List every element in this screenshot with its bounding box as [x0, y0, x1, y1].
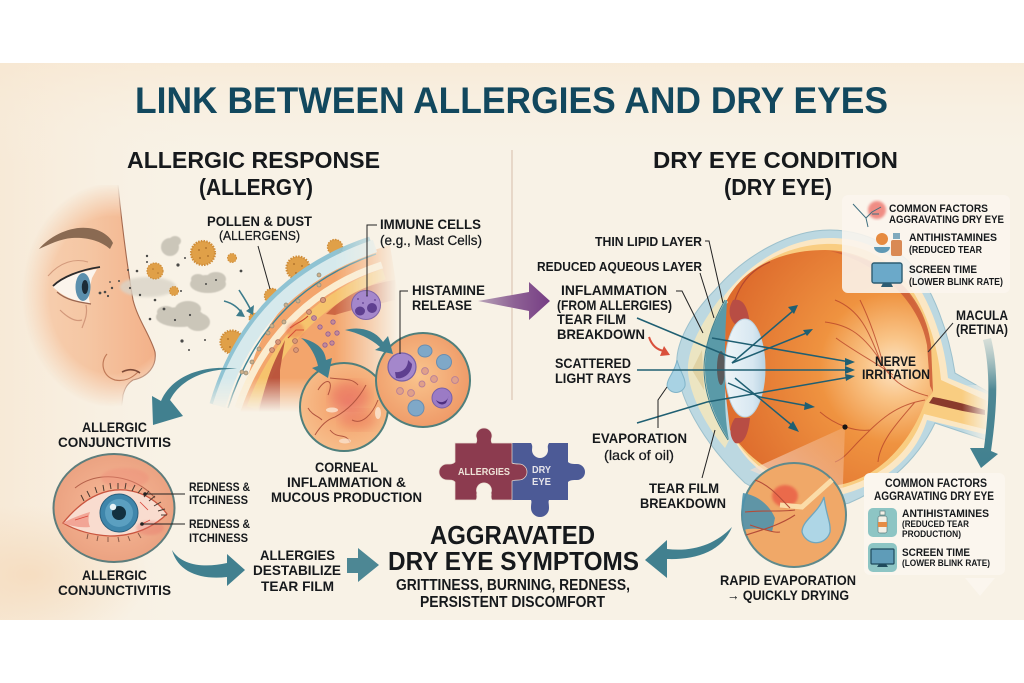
icon: puzzle pieces [439, 428, 585, 517]
panel: common factors top [842, 195, 1010, 293]
label: allergies destabilize tear film [253, 547, 341, 594]
light ray arrows [637, 310, 850, 427]
icon: red pointer arrow [649, 337, 670, 356]
heading: allergic response: ALLERGIC RESPONSE [127, 147, 380, 173]
heading: allergic response: (ALLERGY) [199, 174, 313, 200]
label: tear film breakdown lower: TEAR FILM [649, 480, 719, 496]
panel: common factors bottom: (REDUCED TEAR [902, 519, 969, 529]
label: macula [928, 308, 1008, 352]
section divider [511, 150, 513, 400]
label: allergic conjunctivitis lower: ALLERGIC [82, 567, 147, 583]
illustration: conjunctiva tissue layers [212, 239, 405, 420]
panel: common factors top: AGGRAVATING DRY EYE [889, 214, 1004, 226]
label: allergic conjunctivitis lower [58, 567, 171, 598]
illustration: pollen and dust particles [99, 236, 342, 354]
icon: iris [100, 494, 138, 532]
eye yellow band [727, 244, 992, 489]
arrow: macula to factors [970, 338, 998, 468]
macula dot and magnifier cone [750, 424, 848, 510]
label: histamine release: RELEASE [412, 298, 472, 313]
label: inflammation: INFLAMMATION [561, 282, 667, 298]
iris [717, 351, 725, 385]
puzzle piece: allergies: ALLERGIES [458, 467, 510, 478]
puzzle piece: allergies [439, 428, 527, 500]
panel: common factors top: ANTIHISTAMINES [909, 232, 997, 244]
label: macula: MACULA [956, 308, 1008, 323]
nerve fade [962, 385, 994, 445]
label: redness and itchiness upper [143, 480, 250, 507]
label: immune cells: IMMUNE CELLS [380, 217, 481, 232]
arrow: eye to destabilize [172, 550, 245, 586]
label: scattered light rays: LIGHT RAYS [555, 370, 631, 386]
label: tear film breakdown upper: BREAKDOWN [557, 326, 645, 342]
panel: common factors bottom: SCREEN TIME [902, 547, 970, 559]
label: allergic conjunctivitis upper [58, 419, 171, 450]
text: symptom list: PERSISTENT DISCOMFORT [420, 594, 605, 611]
heading: aggravated dry eye symptoms [388, 520, 639, 576]
label: nerve irritation: IRRITATION [862, 367, 930, 382]
label: rapid evaporation: RAPID EVAPORATION [720, 572, 856, 588]
puzzle piece: dry eye: DRY [532, 465, 551, 476]
label: redness and itchiness upper: REDNESS & [189, 480, 250, 494]
illustration: face profile [28, 185, 156, 404]
heading: aggravated dry eye symptoms: DRY EYE SYMPTOMS [388, 546, 639, 576]
label: tear film breakdown lower: BREAKDOWN [640, 495, 726, 511]
panel: common factors bottom: COMMON FACTORS [885, 478, 987, 490]
arrows: allergens entering [224, 290, 252, 315]
label: scattered light rays: SCATTERED [555, 355, 631, 371]
label: allergies destabilize tear film: TEAR FILM [261, 578, 334, 594]
label: corneal inflammation: CORNEAL [315, 459, 378, 475]
panel: histamine release circle [376, 333, 470, 427]
label: redness and itchiness lower [140, 517, 250, 545]
icon: eyebrow [39, 228, 113, 249]
label: allergic conjunctivitis lower: CONJUNCTIVITIS [58, 582, 171, 598]
label: pollen and dust: POLLEN & DUST [207, 214, 313, 229]
panel: common factors top: (REDUCED TEAR [909, 245, 983, 256]
icon: pills and bottle [874, 233, 902, 256]
label: immune cells: (e.g., Mast Cells) [380, 233, 482, 248]
eye outer sclera [677, 230, 992, 508]
icon: screen [872, 263, 902, 287]
icon: blood vessel [853, 201, 886, 227]
label: rapid evaporation [720, 572, 856, 603]
heading: dry eye condition [653, 147, 898, 200]
icon: medicine bottle tile [868, 508, 897, 537]
label: evaporation [592, 387, 687, 463]
heading: allergic response [127, 147, 380, 200]
label: reduced aqueous layer [537, 259, 714, 318]
title: LINK BETWEEN ALLERGIES AND DRY EYES [135, 80, 888, 121]
label: allergic conjunctivitis upper: ALLERGIC [82, 419, 147, 435]
label: rapid evaporation: → QUICKLY DRYING [727, 587, 849, 603]
label: tear film breakdown lower [640, 430, 726, 511]
illustration: eyeball cross-section [667, 230, 994, 508]
panel: conjunctivitis eye circle [54, 454, 174, 562]
icon: screen tile [868, 543, 897, 572]
retinal vessels [820, 300, 928, 462]
label: evaporation: (lack of oil) [604, 447, 674, 463]
heading: aggravated dry eye symptoms: AGGRAVATED [430, 520, 595, 550]
panel: tear film detail circle [742, 463, 846, 567]
label: corneal inflammation: MUCOUS PRODUCTION [271, 489, 422, 505]
ciliary body [730, 300, 750, 443]
panel: common factors top: (LOWER BLINK RATE) [909, 277, 1003, 288]
icon: side eye [48, 261, 100, 328]
label: histamine release: HISTAMINE [412, 283, 485, 298]
lens [725, 319, 765, 417]
label: thin lipid layer: THIN LIPID LAYER [595, 234, 703, 249]
panel: common factors bottom: AGGRAVATING DRY EYE [874, 491, 994, 503]
label: scattered light rays [555, 355, 631, 386]
panel: common factors top: SCREEN TIME [909, 264, 977, 276]
label: allergies destabilize tear film: DESTABILIZE [253, 562, 341, 578]
heading: dry eye condition: (DRY EYE) [724, 174, 832, 200]
arrowheads [788, 305, 855, 432]
panel: common factors bottom [864, 473, 1005, 596]
icon: tear drop [802, 497, 830, 543]
label: tear film breakdown upper: TEAR FILM [557, 311, 626, 327]
label: redness and itchiness upper: ITCHINESS [189, 493, 248, 507]
label: reduced aqueous layer: REDUCED AQUEOUS LAYER [537, 259, 703, 274]
label: inflammation: (FROM ALLERGIES) [557, 297, 672, 313]
label: macula: (RETINA) [956, 322, 1008, 337]
label: nerve irritation: NERVE [875, 354, 916, 369]
label: allergies destabilize tear film: ALLERGIES [260, 547, 335, 563]
arrow: to corneal circle [301, 338, 332, 378]
cornea layers [688, 296, 729, 448]
label: nerve irritation [862, 354, 930, 382]
label: redness and itchiness lower: ITCHINESS [189, 531, 248, 545]
pollen grains [147, 240, 342, 354]
panel: common factors top: COMMON FACTORS [889, 203, 988, 215]
heading: dry eye condition: DRY EYE CONDITION [653, 147, 898, 173]
puzzle piece: dry eye [512, 443, 585, 517]
arrow: dry eye to symptoms [645, 527, 732, 578]
panel: corneal inflammation circle [300, 363, 388, 451]
label: inflammation [557, 282, 703, 333]
puzzle piece: dry eye: EYE [532, 477, 551, 488]
arrow: tissue to conjunctivitis [152, 368, 237, 425]
label: pollen and dust: (ALLERGENS) [219, 228, 300, 243]
arrow: to histamine circle [345, 328, 393, 354]
panel: common factors bottom: (LOWER BLINK RATE) [902, 558, 990, 568]
label: corneal inflammation [271, 459, 422, 505]
optic nerve [929, 397, 985, 415]
label: redness and itchiness lower: REDNESS & [189, 517, 250, 531]
panel: common factors bottom: PRODUCTION) [902, 529, 961, 539]
label: histamine release [400, 283, 485, 354]
arrow: purple link [478, 282, 550, 320]
icon: immune cell [352, 290, 380, 320]
label: thin lipid layer [595, 234, 723, 303]
arrow: to symptoms [347, 548, 379, 582]
eye retina interior [724, 250, 933, 486]
text: symptom list: GRITTINESS, BURNING, REDNESS, [396, 577, 630, 594]
label: pollen and dust [207, 214, 313, 289]
label: immune cells [367, 217, 482, 296]
text: symptom list [396, 577, 630, 611]
label: tear film breakdown upper [557, 311, 645, 342]
tear drop [667, 360, 685, 392]
panel: common factors bottom: ANTIHISTAMINES [902, 508, 989, 520]
label: evaporation: EVAPORATION [592, 430, 687, 446]
label: corneal inflammation: INFLAMMATION & [287, 474, 406, 490]
label: allergic conjunctivitis upper: CONJUNCTIVITIS [58, 434, 171, 450]
